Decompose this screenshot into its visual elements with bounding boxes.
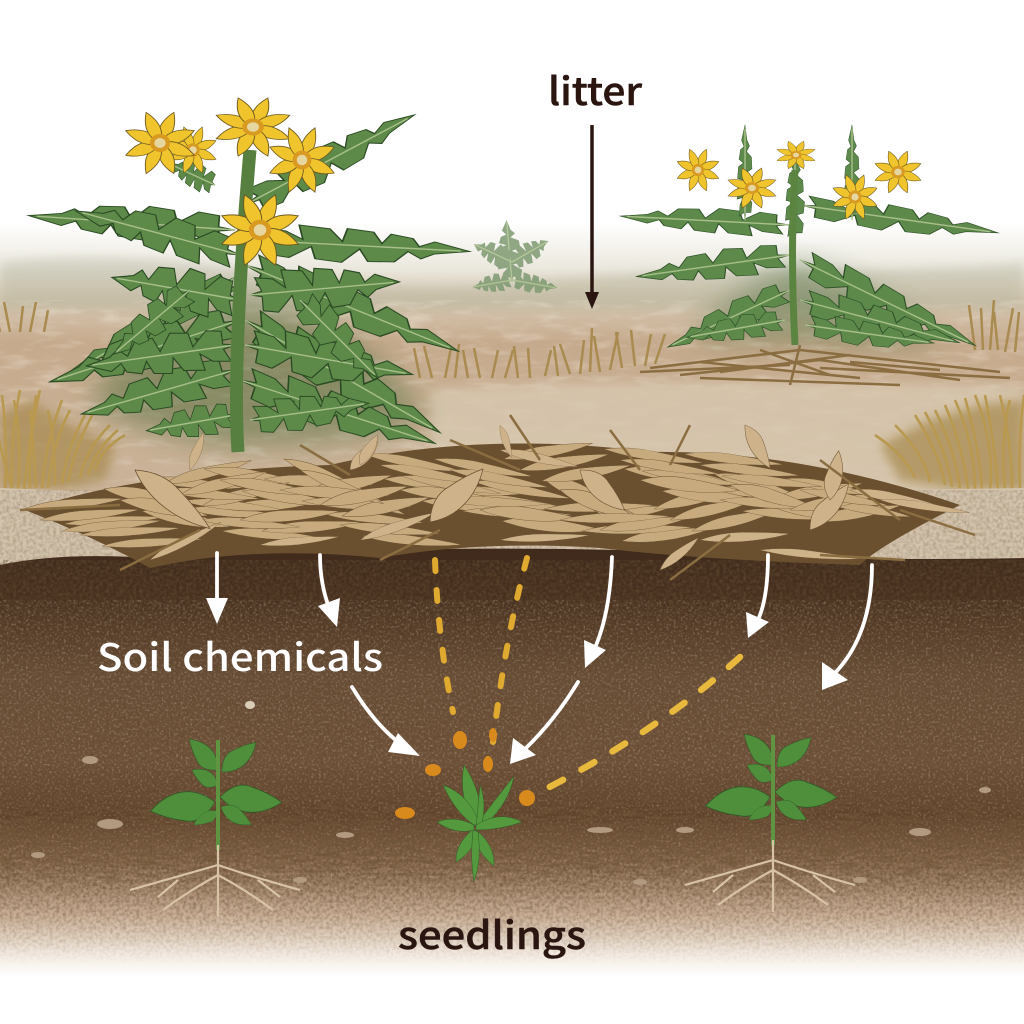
white arrows from litter to soil	[206, 553, 872, 764]
left seedling	[130, 733, 300, 917]
dashed path left	[435, 560, 453, 712]
left flowering plant	[27, 96, 471, 462]
soil cross-section	[0, 548, 1024, 970]
left plant stem	[236, 150, 250, 452]
right plant foliage mass	[690, 260, 940, 345]
raised pale ground bank	[430, 382, 1024, 495]
right plant litter pile	[640, 345, 1010, 385]
right flowering plant	[620, 125, 1000, 360]
right seedling	[685, 728, 855, 912]
soil surface pebbles	[31, 701, 991, 885]
ground strip under litter	[0, 488, 1024, 570]
distant hazy vegetation	[0, 258, 1024, 310]
distant small plant	[469, 219, 559, 297]
arrow 6	[352, 687, 420, 756]
arrow 1	[206, 553, 228, 624]
background: sky and ground surface	[0, 0, 1024, 570]
arrow 5	[822, 565, 872, 690]
label: Soil chemicals: Soil chemicals	[97, 627, 383, 682]
arrow 3	[584, 557, 612, 668]
center seedling	[437, 765, 522, 882]
dashed path middle	[493, 558, 527, 742]
right plant flowers	[676, 140, 923, 221]
litter layer	[20, 415, 975, 580]
litter pointer arrow	[585, 125, 599, 309]
dashed path right	[540, 657, 740, 792]
left plant foliage mass	[90, 300, 425, 445]
ground strip texture	[0, 490, 1024, 560]
orange seeds	[395, 728, 535, 819]
right plant fronds	[620, 125, 1000, 360]
arrow 4	[746, 555, 769, 638]
dashed chemical pathways	[435, 558, 740, 792]
litter spikes and stems	[20, 415, 975, 580]
label: seedlings: seedlings	[398, 905, 586, 960]
left plant flowers	[123, 96, 336, 268]
ground texture	[0, 300, 1024, 500]
left plant fronds	[27, 99, 471, 462]
dry grass middle	[0, 300, 1019, 378]
arrow 7	[510, 682, 578, 764]
label: litter: litter	[548, 61, 642, 116]
dry grass tufts left and right	[0, 390, 1024, 490]
arrow 2	[318, 555, 340, 627]
right plant stem	[792, 170, 795, 345]
